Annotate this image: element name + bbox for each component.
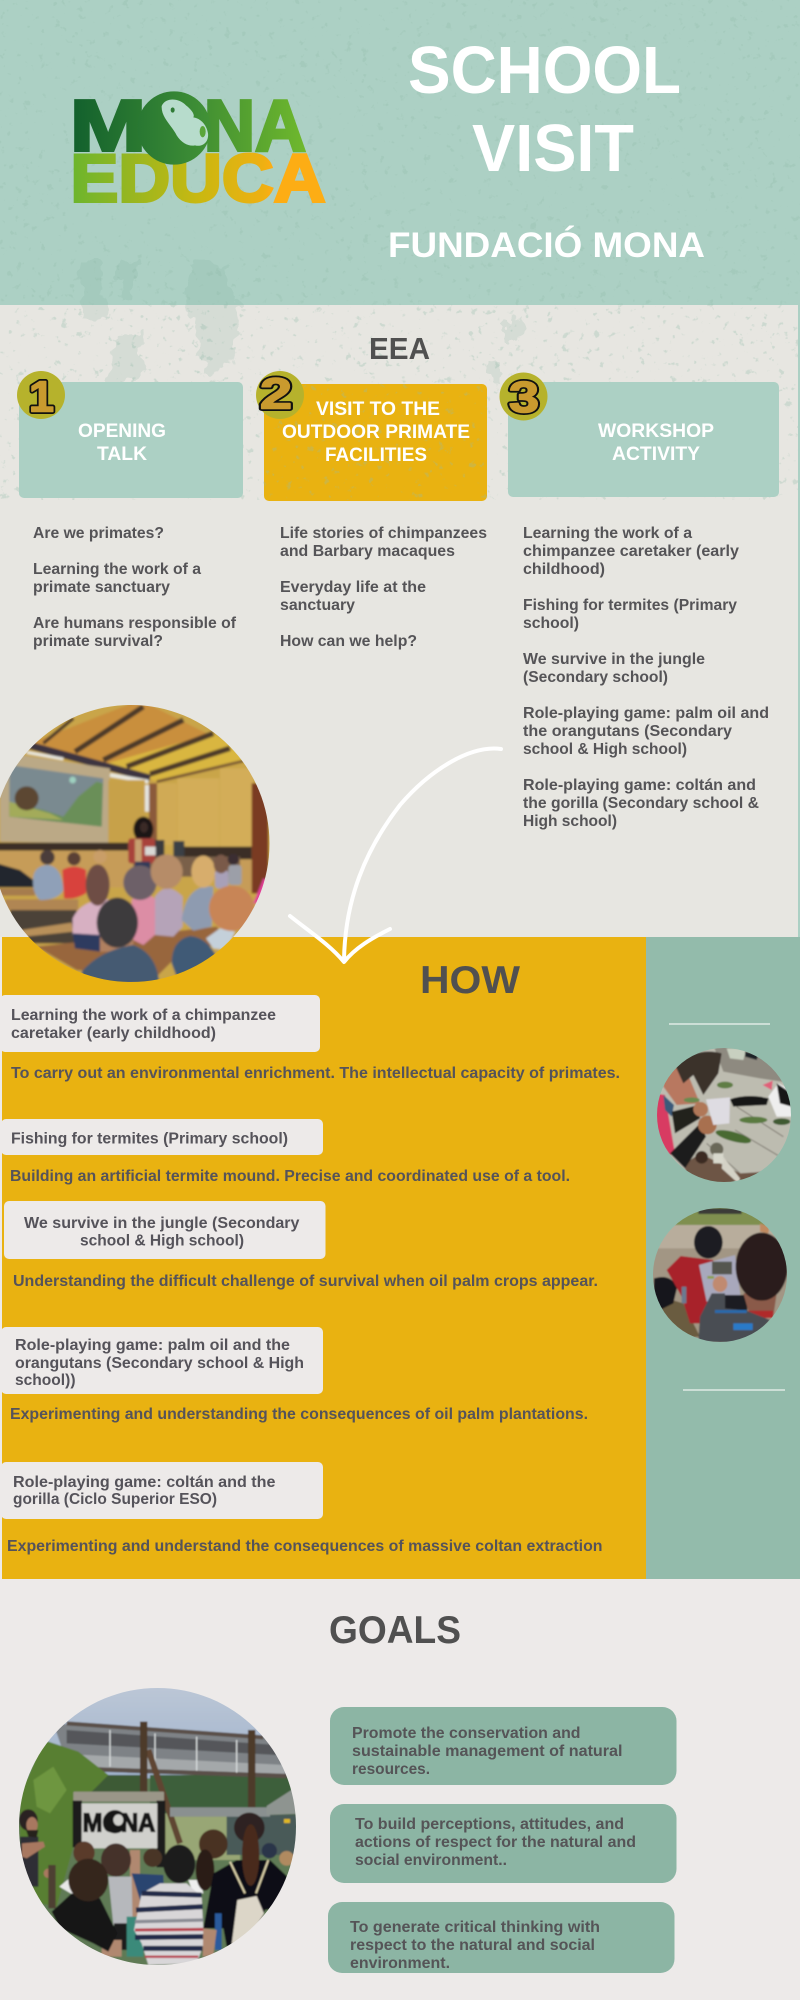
activity 4: school)) bbox=[15, 1372, 76, 1389]
activity 5 bbox=[1, 1462, 323, 1519]
step 1 badge: 1 bbox=[29, 372, 54, 422]
column 2 text: Life stories of chimpanzees bbox=[280, 525, 487, 542]
activity 4 description: Experimenting and understanding the consequences of oil palm plantations. bbox=[10, 1406, 588, 1423]
side panel bbox=[646, 937, 800, 1579]
photo: group at sanctuary sign bbox=[17, 1685, 300, 1972]
title line: school: SCHOOL bbox=[408, 33, 681, 108]
step 1 label: OPENING bbox=[78, 421, 166, 442]
step 2 badge bbox=[256, 370, 304, 419]
goal 1 bbox=[330, 1707, 676, 1785]
column 3 text: school & High school) bbox=[523, 741, 687, 758]
goal 1: resources. bbox=[352, 1761, 430, 1778]
step 2 card bbox=[264, 384, 487, 501]
step 2 label: FACILITIES bbox=[325, 445, 427, 466]
column 3 text: Role-playing game: palm oil and bbox=[523, 705, 769, 722]
activity 4: Role-playing game: palm oil and the bbox=[15, 1337, 290, 1354]
step 3 label: ACTIVITY bbox=[612, 444, 700, 465]
column 1 text: primate survival? bbox=[33, 633, 163, 650]
heading: EEA: EEA bbox=[369, 331, 430, 366]
column 3 text: chimpanzee caretaker (early bbox=[523, 543, 739, 560]
column 2 text: and Barbary macaques bbox=[280, 543, 455, 560]
column 3 text: Learning the work of a bbox=[523, 525, 692, 542]
photo sign wordmark: MONA bbox=[83, 1808, 156, 1838]
title line: visit: VISIT bbox=[472, 111, 634, 186]
activity 1 bbox=[0, 995, 320, 1052]
step 3 label bbox=[598, 421, 714, 465]
activity 3 description: Understanding the difficult challenge of survival when oil palm crops appear. bbox=[13, 1273, 598, 1290]
logo word: EDUCA: EDUCA bbox=[70, 140, 326, 216]
column 3 text: High school) bbox=[523, 813, 617, 830]
column 1 text: Learning the work of a bbox=[33, 561, 201, 578]
heading: goals: GOALS bbox=[329, 1609, 461, 1652]
goal 3: respect to the natural and social bbox=[350, 1937, 595, 1954]
right edge strip bbox=[798, 305, 800, 937]
step 1 card bbox=[17, 371, 243, 498]
goal 2: actions of respect for the natural and bbox=[355, 1834, 636, 1851]
goal 2: To build perceptions, attitudes, and bbox=[355, 1816, 624, 1833]
activity 1: Learning the work of a chimpanzee bbox=[11, 1007, 276, 1024]
column 2 text: How can we help? bbox=[280, 633, 417, 650]
activity 1 description: To carry out an environmental enrichment. The intellectual capacity of primates. bbox=[11, 1065, 620, 1082]
activity 1: caretaker (early childhood) bbox=[11, 1025, 216, 1042]
goal 2 bbox=[330, 1804, 676, 1883]
column 2 text: sanctuary bbox=[280, 597, 355, 614]
column 3 text: the orangutans (Secondary bbox=[523, 723, 732, 740]
step 3 label: WORKSHOP bbox=[598, 421, 714, 442]
step 1 label bbox=[78, 421, 166, 465]
step 2 label: OUTDOOR PRIMATE bbox=[282, 422, 470, 443]
step 2 label: VISIT TO THE bbox=[316, 399, 440, 420]
step 3 card bbox=[500, 372, 779, 497]
goal 3 bbox=[328, 1902, 674, 1973]
how panel bbox=[2, 937, 646, 1579]
column 3 text: Role-playing game: coltán and bbox=[523, 777, 756, 794]
goal 1: sustainable management of natural bbox=[352, 1743, 622, 1760]
step 2 badge: 2 bbox=[260, 370, 292, 418]
activity 4 bbox=[1, 1327, 323, 1394]
activity 2: Fishing for termites (Primary school) bbox=[11, 1130, 288, 1148]
arrow to how panel bbox=[290, 749, 501, 962]
step 3 badge bbox=[500, 372, 548, 422]
step 3 badge: 3 bbox=[509, 373, 539, 422]
step 2 label bbox=[282, 399, 470, 466]
header band bbox=[0, 0, 800, 305]
column 1 text: primate sanctuary bbox=[33, 579, 170, 596]
subtitle: FUNDACIÓ MONA bbox=[388, 225, 705, 265]
activity 5: gorilla (Ciclo Superior ESO) bbox=[13, 1491, 217, 1508]
column 3 text: school) bbox=[523, 615, 579, 632]
column 2 text: Everyday life at the bbox=[280, 579, 426, 596]
logo word: M: M bbox=[70, 86, 146, 166]
column 3 text bbox=[523, 525, 769, 830]
title bbox=[408, 33, 681, 186]
activity 3: school & High school) bbox=[80, 1232, 244, 1250]
heading: how: HOW bbox=[420, 959, 520, 1002]
activity 3: We survive in the jungle (Secondary bbox=[24, 1215, 300, 1232]
photo: children with worksheet bbox=[653, 1208, 787, 1342]
column 3 text: the gorilla (Secondary school & bbox=[523, 795, 759, 812]
column 1 text bbox=[33, 525, 237, 650]
column 1 text: Are humans responsible of bbox=[33, 615, 237, 632]
activity 2 bbox=[1, 1119, 323, 1155]
column 1 text: Are we primates? bbox=[33, 525, 164, 542]
activity 5: Role-playing game: coltán and the bbox=[13, 1474, 276, 1491]
activity 4: orangutans (Secondary school & High bbox=[15, 1355, 304, 1372]
logo: Mona Educa bbox=[70, 86, 326, 216]
goal 1: Promote the conservation and bbox=[352, 1725, 580, 1742]
column 3 text: Fishing for termites (Primary bbox=[523, 597, 737, 614]
photo: children at table bbox=[657, 1048, 791, 1182]
activity 2 description: Building an artificial termite mound. Precise and coordinated use of a tool. bbox=[10, 1168, 570, 1185]
column 2 text bbox=[280, 525, 487, 650]
logo circle with monkey head bbox=[137, 91, 211, 165]
step 1 label: TALK bbox=[97, 444, 147, 465]
photo: talk in classroom bbox=[0, 705, 270, 982]
column 3 text: We survive in the jungle bbox=[523, 651, 705, 668]
column 3 text: childhood) bbox=[523, 561, 605, 578]
activity 5 description: Experimenting and understand the consequences of massive coltan extraction bbox=[7, 1538, 602, 1555]
speckled paint texture bbox=[0, 0, 800, 500]
column 3 text: (Secondary school) bbox=[523, 669, 668, 686]
step 1 badge bbox=[17, 371, 65, 422]
step 3 badge: 3 bbox=[509, 373, 539, 422]
step 1 badge: 1 bbox=[29, 372, 54, 422]
step 2 badge: 2 bbox=[260, 370, 292, 418]
goal 3: environment. bbox=[350, 1955, 450, 1972]
activity 3 bbox=[4, 1201, 326, 1259]
logo word: NA: NA bbox=[204, 86, 306, 166]
goal 2: social environment.. bbox=[355, 1852, 507, 1869]
goal 3: To generate critical thinking with bbox=[350, 1919, 600, 1936]
EEA section background bbox=[0, 305, 800, 937]
